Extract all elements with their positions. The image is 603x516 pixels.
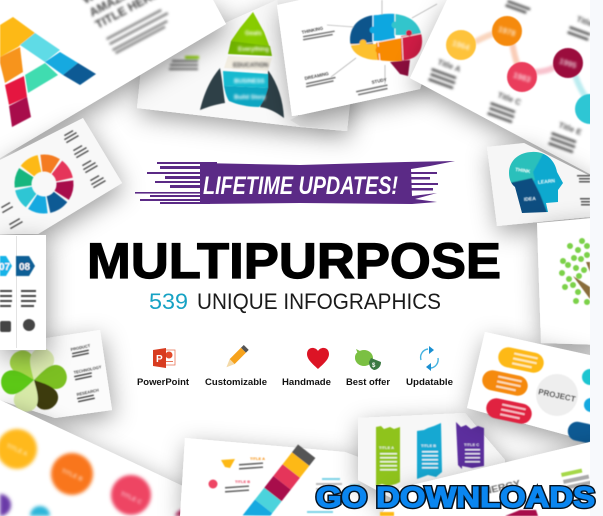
icon: PowerPoint: P [156, 354, 163, 365]
timeline titles [428, 0, 601, 153]
subtitle number: 539 [149, 289, 188, 314]
panel: timeline slide [410, 0, 603, 186]
brain puzzle chart [349, 12, 423, 77]
watermark: Go Downloads: GO DOWNLOADS [316, 482, 595, 514]
head labels: THINK [515, 167, 531, 175]
blob labels: TITLE A [5, 443, 29, 458]
pill red [484, 396, 534, 426]
panel: big A slide [0, 0, 226, 158]
feature: Customizable [205, 345, 267, 387]
brain callout text [301, 25, 388, 95]
panel: head slide [487, 143, 600, 226]
panel: wheel slide [0, 118, 122, 234]
rocket label text: Goals [245, 31, 262, 37]
rocket label text: BUSINESS [234, 79, 265, 85]
title: MULTIPURPOSE [87, 233, 501, 289]
label: Best offer [346, 377, 391, 387]
timeline years: 1983 [512, 71, 532, 85]
hexagon 08: 08 [19, 262, 31, 273]
project circle: PROJECT [537, 387, 576, 404]
brush stroke purple: TITLE C [464, 442, 479, 447]
pill orange [480, 368, 530, 398]
feature: Best offer [346, 349, 391, 387]
feature: Handmade [282, 348, 331, 387]
panel: project slide [467, 332, 603, 445]
subtitle [149, 289, 441, 314]
rocket label text [233, 31, 269, 101]
panel: brush strokes slide [358, 413, 505, 500]
label: PowerPoint [137, 377, 189, 387]
blob circles [0, 429, 200, 516]
feature: Updatable [406, 346, 453, 387]
brain callout text: THINKING [301, 25, 324, 35]
brush stroke [135, 161, 455, 204]
blob labels [5, 443, 143, 506]
panel: tree slide [537, 217, 603, 345]
rocket label text: EDUCATION [233, 63, 268, 69]
blob labels: TITLE B [60, 468, 84, 483]
panel: rocket slide [137, 0, 350, 131]
brain callout text: STUDY [371, 77, 387, 85]
tree chart [559, 238, 590, 305]
label: Handmade [282, 377, 331, 387]
head chart [509, 152, 563, 213]
right side pills [566, 369, 598, 444]
flower chart [0, 345, 68, 415]
head side notes [577, 175, 590, 206]
energy label: ENERGY [476, 478, 521, 498]
feature: PowerPoint [137, 348, 189, 387]
pencil notes [208, 456, 265, 493]
timeline titles: Title D [575, 14, 601, 31]
panel: flower slide [0, 330, 112, 418]
flower notes: PRODUCT [70, 343, 91, 352]
banner text: LIFETIME UPDATES! [203, 172, 398, 200]
panel: blobs slide [0, 400, 240, 516]
steps text [0, 290, 36, 307]
brain callouts [327, 0, 437, 84]
label: Updatable [406, 377, 453, 387]
timeline connectors [475, 33, 588, 100]
panel: brain puzzle slide [277, 0, 448, 116]
brush stroke blue [417, 423, 442, 479]
brush stroke green [376, 426, 400, 486]
icon: piggy bank: $ [372, 363, 376, 369]
panel: bottom right slide [380, 439, 603, 516]
flower notes: TECHNOLOGY [73, 364, 102, 375]
rocket chart [200, 12, 284, 118]
rocket label text: Build Story [234, 95, 267, 101]
panel: pencil slide [180, 438, 420, 516]
brush stroke green: TITLE A [379, 445, 394, 450]
icon: pencil [224, 345, 249, 370]
icon: A logo [0, 17, 96, 127]
pill yellow [496, 345, 546, 375]
right edge strip [590, 0, 603, 516]
step icons [0, 319, 35, 332]
bottom slide accents [380, 469, 591, 516]
timeline titles: Title C [496, 90, 522, 107]
flower notes: RESEARCH [76, 387, 99, 397]
rocket label text: Everything [238, 47, 269, 53]
wheel notes [1, 130, 106, 229]
brush stroke blue: TITLE B [421, 443, 436, 448]
rocket side note [169, 56, 199, 70]
wheel chart [15, 155, 73, 213]
timeline years: 1964 [451, 39, 471, 53]
head labels [515, 167, 556, 203]
timeline years: 1995 [558, 57, 578, 71]
icon: refresh arrows [421, 346, 438, 371]
timeline years [451, 25, 578, 85]
banner: lifetime updates [135, 161, 455, 204]
icon: heart [307, 348, 329, 369]
brain callout text: DREAMING [304, 71, 330, 81]
subtitle text: UNIQUE INFOGRAPHICS [197, 289, 441, 314]
panel: numbered steps slide [0, 235, 46, 350]
slide paragraph [106, 9, 168, 54]
pencil slide right notes [307, 478, 360, 513]
head labels: LEARN [538, 178, 556, 186]
timeline titles: Title E [557, 120, 583, 137]
pencil notes: TITLE B [235, 479, 250, 484]
blob labels: TITLE C [119, 491, 143, 506]
label: Customizable [205, 377, 267, 387]
head labels: IDEA [524, 196, 536, 203]
brush stroke purple [456, 422, 484, 469]
timeline years: 1978 [497, 25, 517, 39]
pencil chart [243, 444, 315, 516]
watermark: Go Downloads: GO DOWNLOADS [316, 482, 595, 514]
timeline titles: Title A [436, 57, 462, 74]
timeline circles [446, 16, 603, 124]
pencil notes: TITLE A [250, 456, 265, 461]
flower notes [70, 343, 102, 402]
